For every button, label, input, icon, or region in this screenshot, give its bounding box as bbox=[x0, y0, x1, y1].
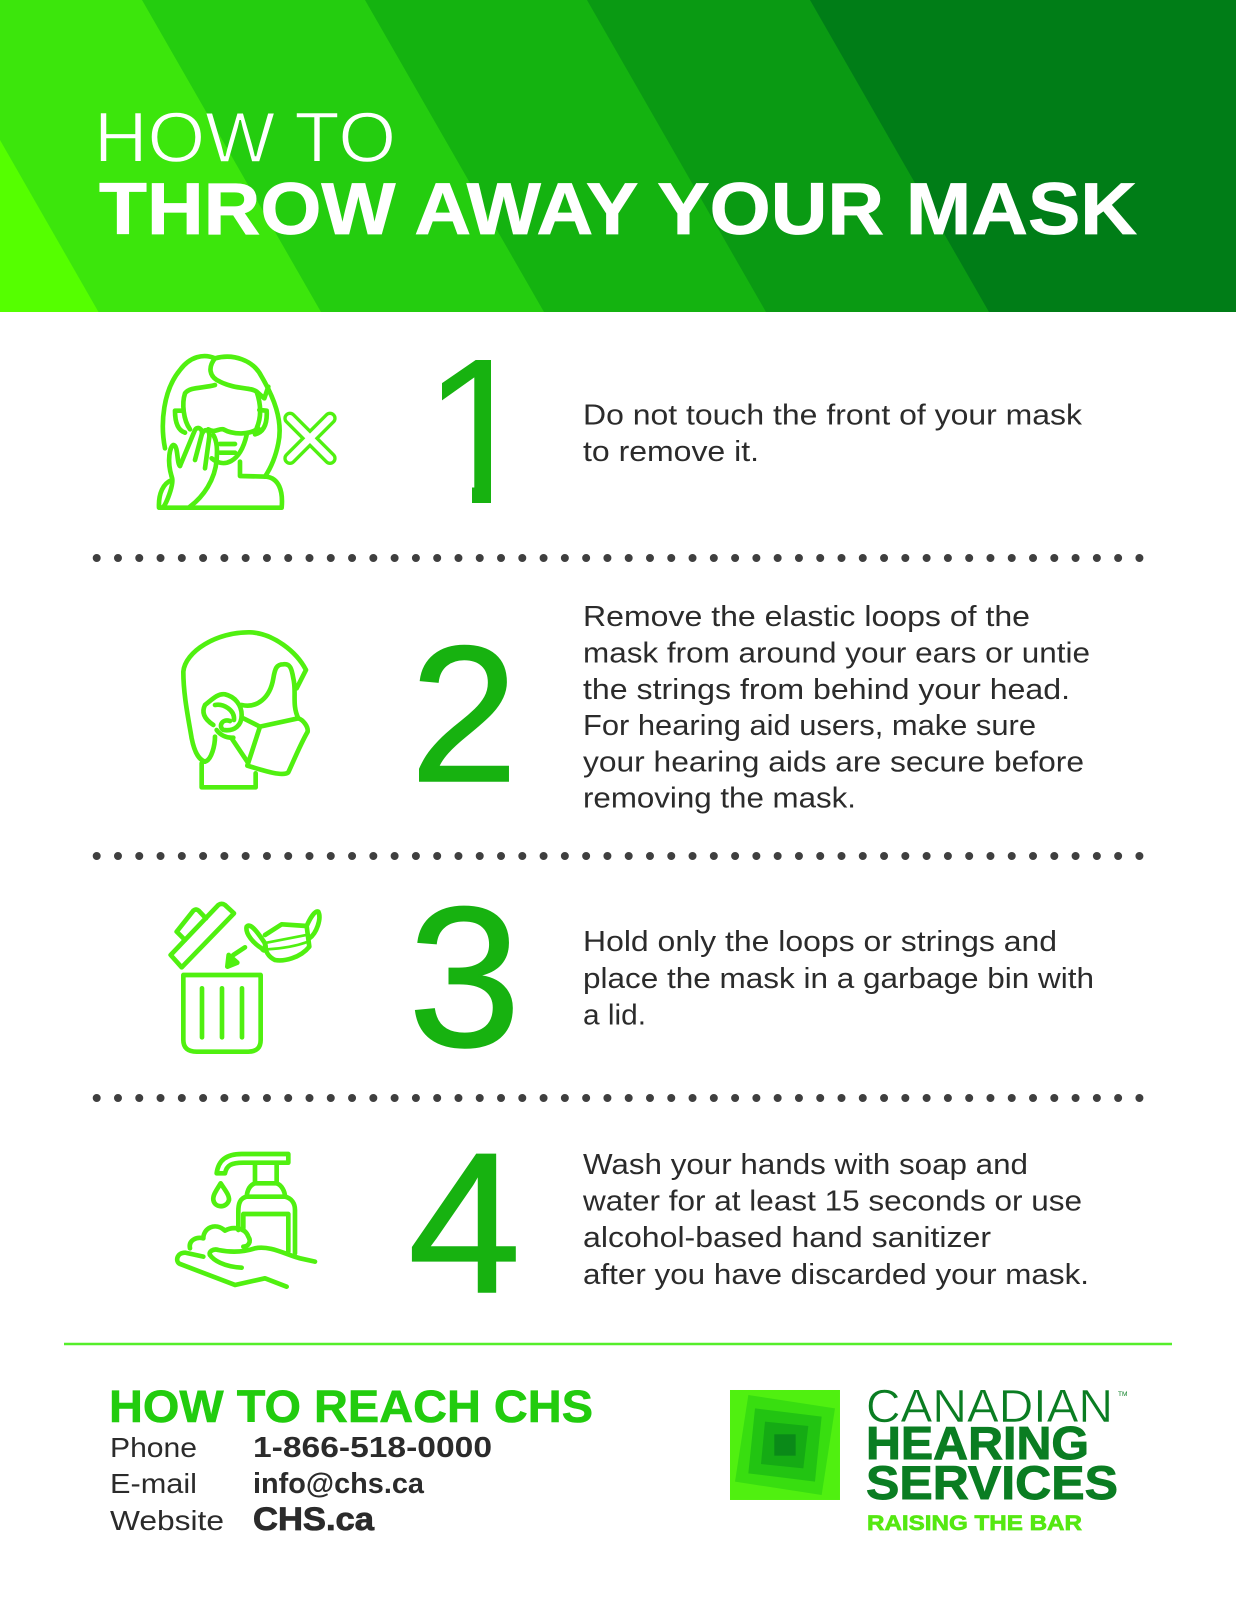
title: HOW TO bbox=[94, 99, 396, 178]
step 2 text: mask from around your ears or untie bbox=[583, 638, 1090, 670]
step 3 text: place the mask in a garbage bin with bbox=[583, 963, 1094, 995]
contact rows: E-mail bbox=[110, 1468, 197, 1499]
step 1 text: to remove it. bbox=[583, 436, 759, 468]
logo wordmark bbox=[866, 1380, 1127, 1509]
logo wordmark: TM bbox=[1118, 1391, 1127, 1398]
step 4 text: alcohol-based hand sanitizer bbox=[583, 1222, 992, 1254]
number 1: 1 bbox=[422, 316, 538, 548]
step 2 text bbox=[583, 601, 1090, 814]
step 3 text: a lid. bbox=[583, 1000, 646, 1032]
step 1 bbox=[156, 354, 1082, 510]
step 2 text: Remove the elastic loops of the bbox=[583, 601, 1030, 633]
contact rows: info@chs.ca bbox=[253, 1468, 425, 1500]
divider dots bbox=[97, 554, 1140, 562]
step 3 text: Hold only the loops or strings and bbox=[583, 926, 1057, 958]
contact rows bbox=[110, 1432, 492, 1537]
footer rule bbox=[64, 1343, 1172, 1345]
divider dots bbox=[97, 852, 1140, 860]
logo tagline: RAISING THE BAR bbox=[867, 1512, 1082, 1535]
logo mark: nested rotated squares bbox=[730, 1390, 840, 1500]
contact rows: Website bbox=[110, 1505, 224, 1536]
divider dots bbox=[97, 1094, 1140, 1102]
step 1 text bbox=[583, 400, 1083, 468]
header banner bbox=[0, 0, 1236, 312]
step 2 text: your hearing aids are secure before bbox=[583, 746, 1084, 778]
step 2 bbox=[183, 601, 1090, 823]
step 2 text: the strings from behind your head. bbox=[583, 674, 1070, 706]
contact rows: Phone bbox=[110, 1432, 197, 1463]
step 4 bbox=[177, 1112, 1089, 1335]
contact rows: CHS.ca bbox=[253, 1501, 374, 1537]
step 4 text: after you have discarded your mask. bbox=[583, 1259, 1089, 1291]
contact heading: HOW TO REACH CHS bbox=[109, 1381, 593, 1432]
icon: hand washing with soap pump bbox=[177, 1154, 315, 1287]
contact rows: 1-866-518-0000 bbox=[253, 1432, 492, 1464]
icon: head in profile with mask and ear loop bbox=[183, 632, 308, 787]
title: THROW AWAY YOUR MASK bbox=[99, 169, 1137, 250]
logo wordmark: CANADIAN bbox=[866, 1380, 1113, 1432]
step 4 text bbox=[582, 1149, 1089, 1291]
logo wordmark: SERVICES bbox=[866, 1456, 1118, 1509]
step 4 text: water for at least 15 seconds or use bbox=[582, 1186, 1082, 1218]
step 1 text: Do not touch the front of your mask bbox=[583, 400, 1083, 432]
title bbox=[94, 99, 1137, 250]
number 3: 3 bbox=[408, 866, 521, 1089]
number 4: 4 bbox=[408, 1112, 521, 1335]
icon: woman touching mask front with X bbox=[159, 356, 330, 508]
icon: mask dropped into garbage bin bbox=[171, 904, 319, 1052]
step 2 text: removing the mask. bbox=[583, 782, 856, 814]
step 4 text: Wash your hands with soap and bbox=[583, 1149, 1028, 1181]
logo bbox=[730, 1380, 1127, 1535]
logo wordmark: HEARING bbox=[866, 1417, 1089, 1469]
number 2: 2 bbox=[410, 606, 518, 823]
step 3 text bbox=[583, 926, 1094, 1032]
step 3 bbox=[171, 866, 1094, 1089]
step 2 text: For hearing aid users, make sure bbox=[583, 710, 1036, 742]
contact panel bbox=[109, 1381, 593, 1537]
